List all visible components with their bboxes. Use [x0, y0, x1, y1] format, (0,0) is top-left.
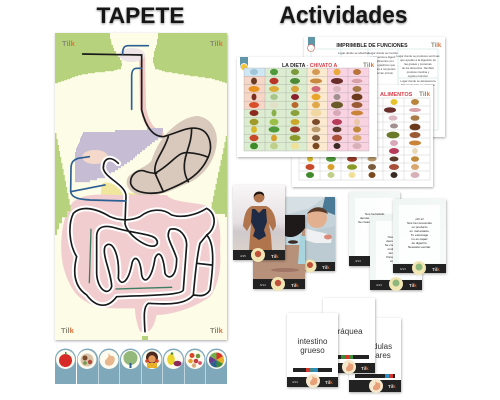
- icon: assorted foods: [188, 353, 202, 368]
- card: intestino grueso: grueso: [300, 346, 325, 355]
- card: tráquea: tráquea: [335, 327, 363, 336]
- card: riddle text 3: Tilk: [432, 267, 440, 272]
- description: column 3: que ayudan a la digestión de: [400, 58, 436, 62]
- icon: apple: [59, 352, 72, 367]
- card: riddle text 3: [393, 199, 446, 275]
- description: column 3: [396, 54, 440, 78]
- card: glándulas salivares: salivares: [359, 351, 391, 360]
- card: riddle text 2: molest: [388, 247, 397, 251]
- card: riddle text 3: en mal estado.: [410, 229, 430, 233]
- card: riddle text 3: Nos ha consumido: [407, 221, 432, 225]
- card: riddle text 3: 6/14: [400, 267, 406, 271]
- icon: food plate: [80, 354, 94, 366]
- card: baby photo: Tilk: [322, 265, 330, 270]
- organ: esophagus: [142, 55, 163, 136]
- card: intestino grueso: intestino: [298, 337, 328, 346]
- panel: category tabs: [55, 348, 227, 384]
- description: column 2: y forman el bolo: [373, 71, 393, 75]
- description: column 3: las grasas y proteínas: [404, 62, 432, 66]
- sheet tab: [308, 37, 315, 47]
- title: TAPETE: TAPETE: [96, 3, 184, 28]
- card: boy photo: [253, 215, 305, 291]
- card: riddle text 3: ¡Ah sí!: [415, 217, 424, 221]
- card: tráquea: [323, 298, 375, 374]
- organ: mouth and throat: [119, 48, 145, 62]
- card: baby photo: [285, 197, 335, 272]
- description: column 2: ayudan a romperlos: [371, 67, 396, 71]
- card: riddle text 2: demasia: [386, 239, 398, 243]
- background: green left wedge: [55, 133, 71, 235]
- logo top left: Tilk: [62, 39, 76, 48]
- organ: pancreas: [101, 182, 165, 205]
- description: column 2: y comienza a digerir: [370, 55, 396, 59]
- card: woman photo: [233, 185, 285, 262]
- icon: stomach: [105, 353, 115, 366]
- logo bottom left: Tilk: [61, 326, 75, 335]
- sheet heading: ALIMENTOS: [380, 92, 413, 98]
- sheet heading: IMPRIMIBLE DE FUNCIONES: [336, 43, 408, 49]
- table grid: [311, 49, 438, 130]
- card: riddle text 3: Tu estómago: [411, 233, 429, 237]
- card: boy photo: 6/14: [260, 283, 266, 287]
- card: boy photo: Tilk: [291, 283, 299, 288]
- sheet tab icon: [308, 44, 314, 52]
- description: column 2: los alimentos con: [372, 59, 394, 63]
- logo bottom right: Tilk: [210, 326, 224, 335]
- card: riddle text 1: 4/14: [355, 259, 361, 263]
- card: riddle text 3: de digerirlo.: [412, 241, 427, 245]
- organ: stomach: [127, 116, 217, 196]
- card: riddle text 2: [370, 215, 422, 291]
- card: riddle text 2: Se crean p: [385, 243, 400, 247]
- description: column 3: regula el azúcar.: [408, 74, 428, 78]
- description: column 4: [400, 79, 436, 87]
- icon: tree lungs: [124, 351, 138, 368]
- card: riddle text 2: 4/14: [376, 283, 382, 287]
- description: column 2: jugos gástricos que: [370, 63, 395, 67]
- logo top right: Tilk: [210, 39, 224, 48]
- panel: foods sheet (back): [292, 85, 433, 187]
- card: woman photo: 4/15: [240, 254, 246, 258]
- organ: liver: [75, 128, 163, 182]
- card: riddle text 1: demas: [360, 216, 370, 220]
- card: riddle text 2: cor: [390, 259, 394, 263]
- card: glándulas salivares: Tilk: [388, 384, 396, 389]
- title: Actividades: Actividades: [280, 2, 408, 29]
- description: column 3: produce insulina y: [407, 70, 430, 74]
- card: riddle text 2: tanto: [389, 251, 396, 255]
- food items: [306, 99, 421, 178]
- background: green right wedge: [210, 136, 227, 217]
- panel: functions printable sheet: [304, 37, 445, 137]
- logo: Tilk: [419, 91, 430, 98]
- card: tráquea: Tilk: [361, 366, 369, 371]
- description: column 3: Lugar donde se producen enzimas: [396, 54, 440, 58]
- stomach and digestive path lines: [83, 54, 211, 193]
- card: intestino grueso: 4/14: [292, 380, 298, 384]
- description: column 1: Lugar donde se absorben: [338, 51, 370, 55]
- card: riddle text 3: un producto: [412, 225, 428, 229]
- icon: girl: [145, 352, 159, 368]
- table grid: [299, 98, 430, 180]
- card: riddle text 2: Para dig: [386, 255, 398, 259]
- panel: digestive system mat: [55, 33, 227, 340]
- background: green notch: [142, 336, 148, 340]
- card: glándulas salivares: glándulas: [358, 342, 392, 351]
- organ: gallbladder: [82, 150, 108, 164]
- panel: diet chart sheet (front): [237, 57, 377, 157]
- card: intestino grueso: Tilk: [325, 380, 333, 385]
- table colour columns: [244, 68, 369, 151]
- intestine maze line: [70, 159, 214, 332]
- card: riddle text 1: [349, 192, 400, 266]
- card: glándulas salivares: [349, 318, 401, 393]
- description: column 4: bilis producida en el hígado: [401, 83, 435, 87]
- logo: Tilk: [431, 43, 442, 49]
- description: column 4: Lugar donde se almacena la: [400, 79, 436, 83]
- logo: Tilk: [363, 62, 374, 69]
- card: riddle text 1: Nos ha bebido: [365, 212, 385, 216]
- description: column 2: Lugar donde se mezcla: [368, 51, 398, 55]
- card: riddle text 2: Nos fa: [388, 235, 397, 239]
- background: green right shoulder: [153, 33, 227, 83]
- card: riddle text 3: Necesita vomitar.: [408, 245, 431, 249]
- icon: color wheel: [209, 352, 224, 368]
- description: column 3: de los alimentos. También: [402, 66, 435, 70]
- icon: fruit: [167, 352, 182, 366]
- background: green left shoulder: [55, 33, 122, 83]
- description: column 2: [368, 51, 398, 75]
- blue accessory gland lines: [71, 46, 148, 201]
- sheet tab: [240, 57, 248, 68]
- card: riddle text 2: Tilk: [409, 283, 417, 288]
- organ: intestines: [61, 194, 220, 332]
- sheet tab icon: [240, 64, 248, 70]
- card: riddle text 1: Se crean: [358, 220, 370, 224]
- sheet heading: LA DIETA - CHIVATO A: [282, 63, 337, 69]
- card: riddle text 3: no es capaz: [411, 237, 428, 241]
- food items: [248, 69, 363, 149]
- card: intestino grueso: [287, 313, 338, 388]
- card: woman photo: Tilk: [271, 254, 279, 259]
